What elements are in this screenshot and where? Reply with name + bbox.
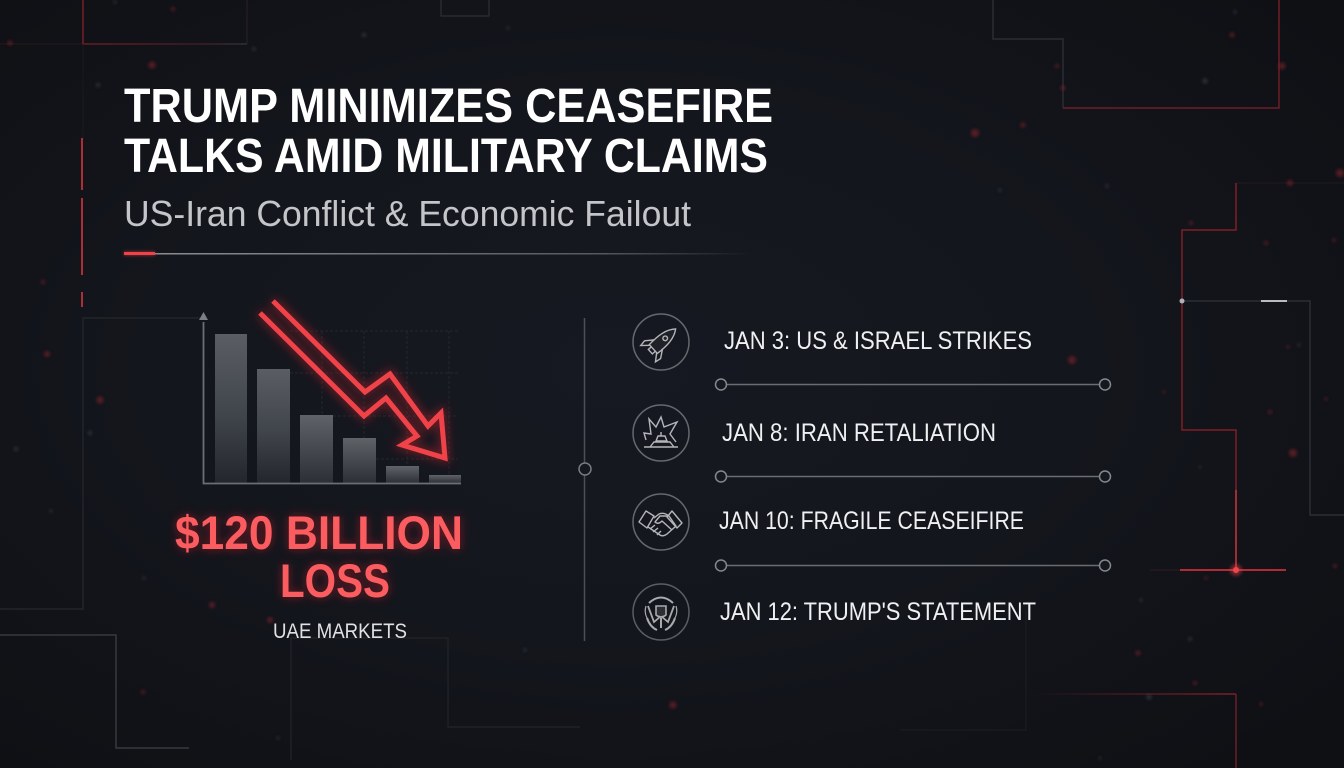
title underline	[124, 252, 752, 256]
left accent ruler	[81, 138, 83, 307]
panel: timeline	[633, 314, 1110, 640]
loss amount: LOSS	[280, 554, 390, 607]
timeline text: strikes: JAN 3: US & ISRAEL STRIKES	[724, 327, 1032, 355]
panel divider with node	[579, 318, 591, 641]
icon: presidential seal	[633, 584, 689, 640]
loss amount	[175, 506, 463, 607]
bar chart	[199, 312, 461, 484]
loss amount: $120 BILLION	[175, 506, 463, 559]
panel: market loss	[175, 301, 463, 643]
loss amount: LOSS	[280, 554, 390, 607]
timeline text: statement: JAN 12: TRUMP'S STATEMENT	[720, 598, 1036, 626]
subtitle: US-Iran Conflict & Economic Failout	[124, 193, 691, 234]
market label: UAE MARKETS	[273, 620, 407, 643]
timeline text: ceasefire: JAN 10: FRAGILE CEASEIFIRE	[719, 507, 1024, 535]
timeline text: retaliation: JAN 8: IRAN RETALIATION	[722, 419, 996, 447]
title: TRUMP MINIMIZES CEASEFIRE	[124, 80, 773, 133]
title	[124, 80, 773, 183]
icon: rocket	[633, 314, 689, 370]
icon: explosion	[633, 405, 689, 461]
arrow: falling market	[260, 301, 445, 458]
icon: handshake	[633, 494, 689, 550]
connectors	[716, 379, 1110, 571]
loss amount: $120 BILLION	[175, 506, 463, 559]
title: TALKS AMID MILITARY CLAIMS	[124, 130, 768, 183]
